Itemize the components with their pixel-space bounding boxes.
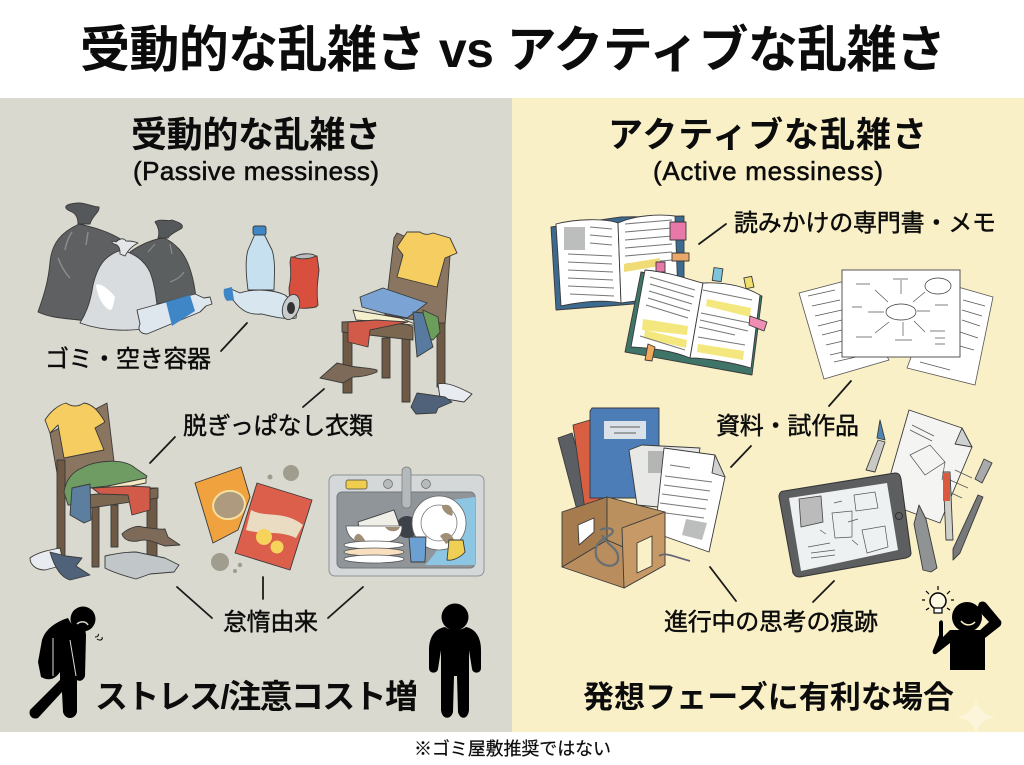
icon: plastic bottles and can (224, 226, 319, 322)
icon: notebooks (558, 408, 659, 510)
icon: tablet (779, 473, 911, 577)
icon: sink with dirty dishes (329, 467, 484, 576)
connector line: books (699, 224, 726, 244)
icon: mind map and notes (799, 270, 993, 385)
panel: passive messiness (0, 98, 512, 732)
icon: stacked documents (629, 445, 725, 552)
icon: pens (866, 420, 992, 572)
icon: sketch paper (884, 410, 972, 523)
icon: chair with clothes, top right (320, 232, 472, 414)
icon: person with light bulb (922, 586, 1001, 670)
icon: cardboard model (562, 497, 690, 588)
connector line: trash (221, 323, 247, 351)
label: clothes: 脱ぎっぱなし衣類 (183, 413, 373, 440)
icon: garbage bags (38, 203, 212, 334)
label: documents and prototypes: 資料・試作品 (716, 413, 859, 440)
connector line: documents top (829, 381, 851, 406)
icon: snack bags (195, 465, 312, 573)
footnote: ※ゴミ屋敷推奨ではない (414, 739, 611, 759)
connector line: lazy left (177, 587, 212, 618)
icon: chair with clothes, lower left (30, 403, 180, 580)
icon: standing person (429, 604, 481, 718)
connector line: lazy right (328, 587, 363, 618)
label: traces of thinking: 進行中の思考の痕跡 (664, 609, 878, 636)
conclusion: active: 発想フェーズに有利な場合 (583, 680, 954, 715)
label: lazy origin: 怠惰由来 (223, 609, 318, 636)
icon: slumped person (30, 606, 102, 719)
connector line: clothes left (150, 437, 175, 463)
label: trash and containers: ゴミ・空き容器 (45, 346, 211, 373)
icon: open book with blue cover (551, 215, 689, 310)
connector line: documents left (731, 446, 751, 467)
icon: open book with green cover (625, 268, 767, 375)
heading: active: アクティブな乱雑さ (608, 115, 927, 155)
connector line: traces right (813, 581, 834, 602)
connector line: lazy middle (262, 577, 264, 599)
heading: passive: 受動的な乱雑さ (131, 114, 381, 155)
connector line: clothes top (303, 389, 324, 407)
subheading: active: (Active messiness) (653, 156, 883, 186)
icon: sparkle watermark (956, 699, 996, 735)
label: books and memos: 読みかけの専門書・メモ (734, 210, 996, 237)
title: 受動的な乱雑さ vs アクティブな乱雑さ (80, 22, 946, 78)
conclusion: passive: ストレス/注意コスト増 (95, 678, 418, 715)
connector line: traces left (710, 567, 736, 601)
panel: active messiness (512, 98, 1024, 735)
subheading: passive: (Passive messiness) (133, 156, 379, 186)
